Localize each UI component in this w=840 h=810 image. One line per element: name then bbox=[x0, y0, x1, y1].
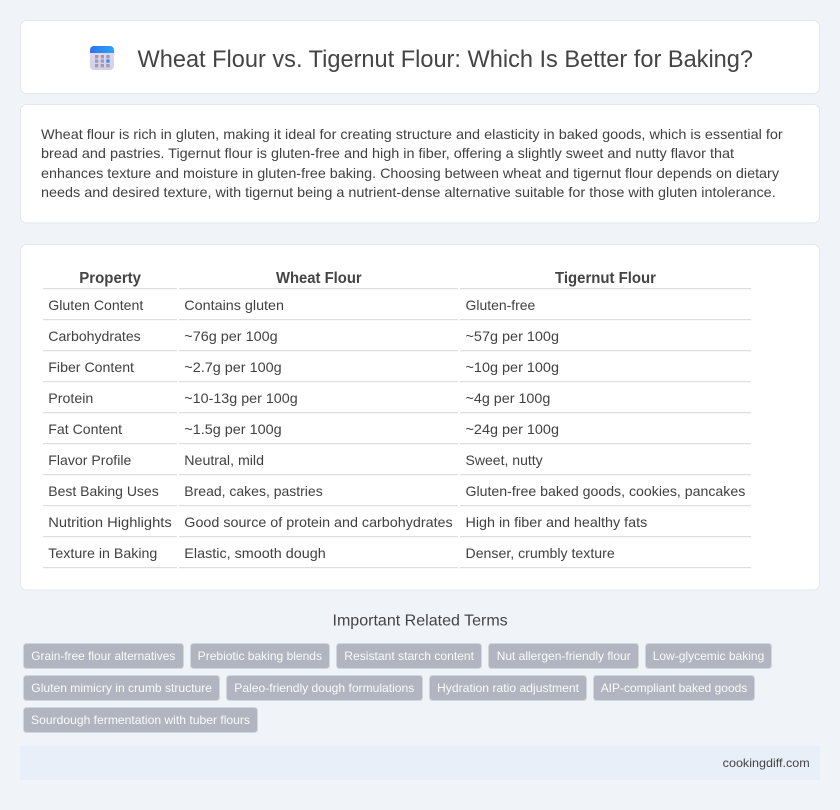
title: Wheat Flour vs. Tigernut Flour: Which Is Better for Baking? bbox=[138, 46, 753, 73]
panel: description bbox=[20, 104, 820, 223]
tag bbox=[336, 644, 482, 668]
panel: description: Wheat flour is rich in gluten, making it ideal for creating structure and elasticity in baked goods, which is essential for bbox=[41, 126, 783, 142]
row: fat content: Fat Content bbox=[48, 421, 122, 437]
tag bbox=[646, 644, 772, 668]
row: nutrition highlights: Nutrition Highlights bbox=[48, 514, 172, 530]
table header row: Property bbox=[79, 270, 141, 287]
row: fiber content bbox=[43, 359, 751, 382]
footer bar bbox=[20, 746, 820, 780]
row: protein: Protein bbox=[48, 390, 93, 406]
tag bbox=[594, 676, 754, 700]
tag: Paleo-friendly dough formulations bbox=[234, 681, 414, 695]
related terms heading: Important Related Terms bbox=[332, 612, 508, 630]
row: flavor profile: Neutral, mild bbox=[184, 452, 264, 468]
row: best baking uses: Best Baking Uses bbox=[48, 483, 159, 499]
tag: Hydration ratio adjustment bbox=[437, 681, 580, 695]
row: best baking uses bbox=[43, 483, 751, 506]
tag bbox=[24, 708, 258, 732]
row: texture in baking: Denser, crumbly texture bbox=[466, 545, 615, 561]
tag bbox=[430, 676, 586, 700]
row: gluten content: Gluten Content bbox=[48, 297, 143, 313]
row: nutrition highlights: High in fiber and healthy fats bbox=[466, 514, 647, 530]
row: best baking uses: Gluten-free baked goods, cookies, pancakes bbox=[466, 483, 745, 499]
icon: calendar bbox=[90, 46, 114, 70]
tag: Low-glycemic baking bbox=[653, 649, 764, 663]
tag: Gluten mimicry in crumb structure bbox=[31, 681, 212, 695]
row: fiber content: Fiber Content bbox=[48, 359, 134, 375]
tag bbox=[226, 676, 422, 700]
row: gluten content: Contains gluten bbox=[184, 297, 284, 313]
row: nutrition highlights: Good source of protein and carbohydrates bbox=[184, 514, 453, 530]
row: protein bbox=[43, 390, 751, 413]
row: carbohydrates bbox=[43, 328, 751, 351]
row: gluten content bbox=[43, 297, 751, 320]
row: nutrition highlights bbox=[43, 514, 751, 537]
table header row bbox=[43, 270, 751, 289]
related terms tags bbox=[24, 644, 772, 732]
row: flavor profile: Sweet, nutty bbox=[466, 452, 543, 468]
panel: description: needs and desired texture, with tigernut being a nutrient-dense alternative suitable for those with gluten intolerance. bbox=[41, 184, 776, 200]
tag: Resistant starch content bbox=[344, 649, 475, 663]
row: texture in baking: Elastic, smooth dough bbox=[184, 545, 326, 561]
tag bbox=[190, 644, 330, 668]
row: fiber content: ~2.7g per 100g bbox=[184, 359, 282, 375]
row: texture in baking bbox=[43, 545, 751, 568]
tag: Prebiotic baking blends bbox=[198, 649, 322, 663]
tag bbox=[24, 644, 184, 668]
panel: description: bread and pastries. Tigernut flour is gluten-free and high in fiber, offering a slightly sweet and nutty flavor that bbox=[41, 145, 734, 161]
row: fat content: ~1.5g per 100g bbox=[184, 421, 282, 437]
row: flavor profile bbox=[43, 452, 751, 475]
panel: comparison table bbox=[20, 244, 820, 590]
tag: Grain-free flour alternatives bbox=[31, 649, 175, 663]
row: fat content bbox=[43, 421, 751, 444]
row: protein: ~4g per 100g bbox=[466, 390, 550, 406]
tag bbox=[24, 676, 220, 700]
table header row: Wheat Flour bbox=[276, 270, 362, 287]
row: fat content: ~24g per 100g bbox=[466, 421, 559, 437]
row: carbohydrates: ~76g per 100g bbox=[184, 328, 278, 344]
panel: description: enhances texture and moisture in gluten-free baking. Choosing between wheat and tigernut flour depends on dietary bbox=[41, 165, 779, 181]
row: flavor profile: Flavor Profile bbox=[48, 452, 132, 468]
tag: AIP-compliant baked goods bbox=[601, 681, 747, 695]
row: carbohydrates: ~57g per 100g bbox=[466, 328, 559, 344]
tag bbox=[488, 644, 638, 668]
row: best baking uses: Bread, cakes, pastries bbox=[184, 483, 323, 499]
table header row: Tigernut Flour bbox=[555, 270, 656, 287]
row: fiber content: ~10g per 100g bbox=[466, 359, 559, 375]
row: texture in baking: Texture in Baking bbox=[48, 545, 157, 561]
row: gluten content: Gluten-free bbox=[466, 297, 536, 313]
row: carbohydrates: Carbohydrates bbox=[48, 328, 141, 344]
panel: header bbox=[20, 20, 820, 94]
footer bar: cookingdiff.com bbox=[723, 756, 810, 770]
row: protein: ~10-13g per 100g bbox=[184, 390, 298, 406]
tag: Nut allergen-friendly flour bbox=[497, 649, 631, 663]
tag: Sourdough fermentation with tuber flours bbox=[31, 713, 250, 727]
